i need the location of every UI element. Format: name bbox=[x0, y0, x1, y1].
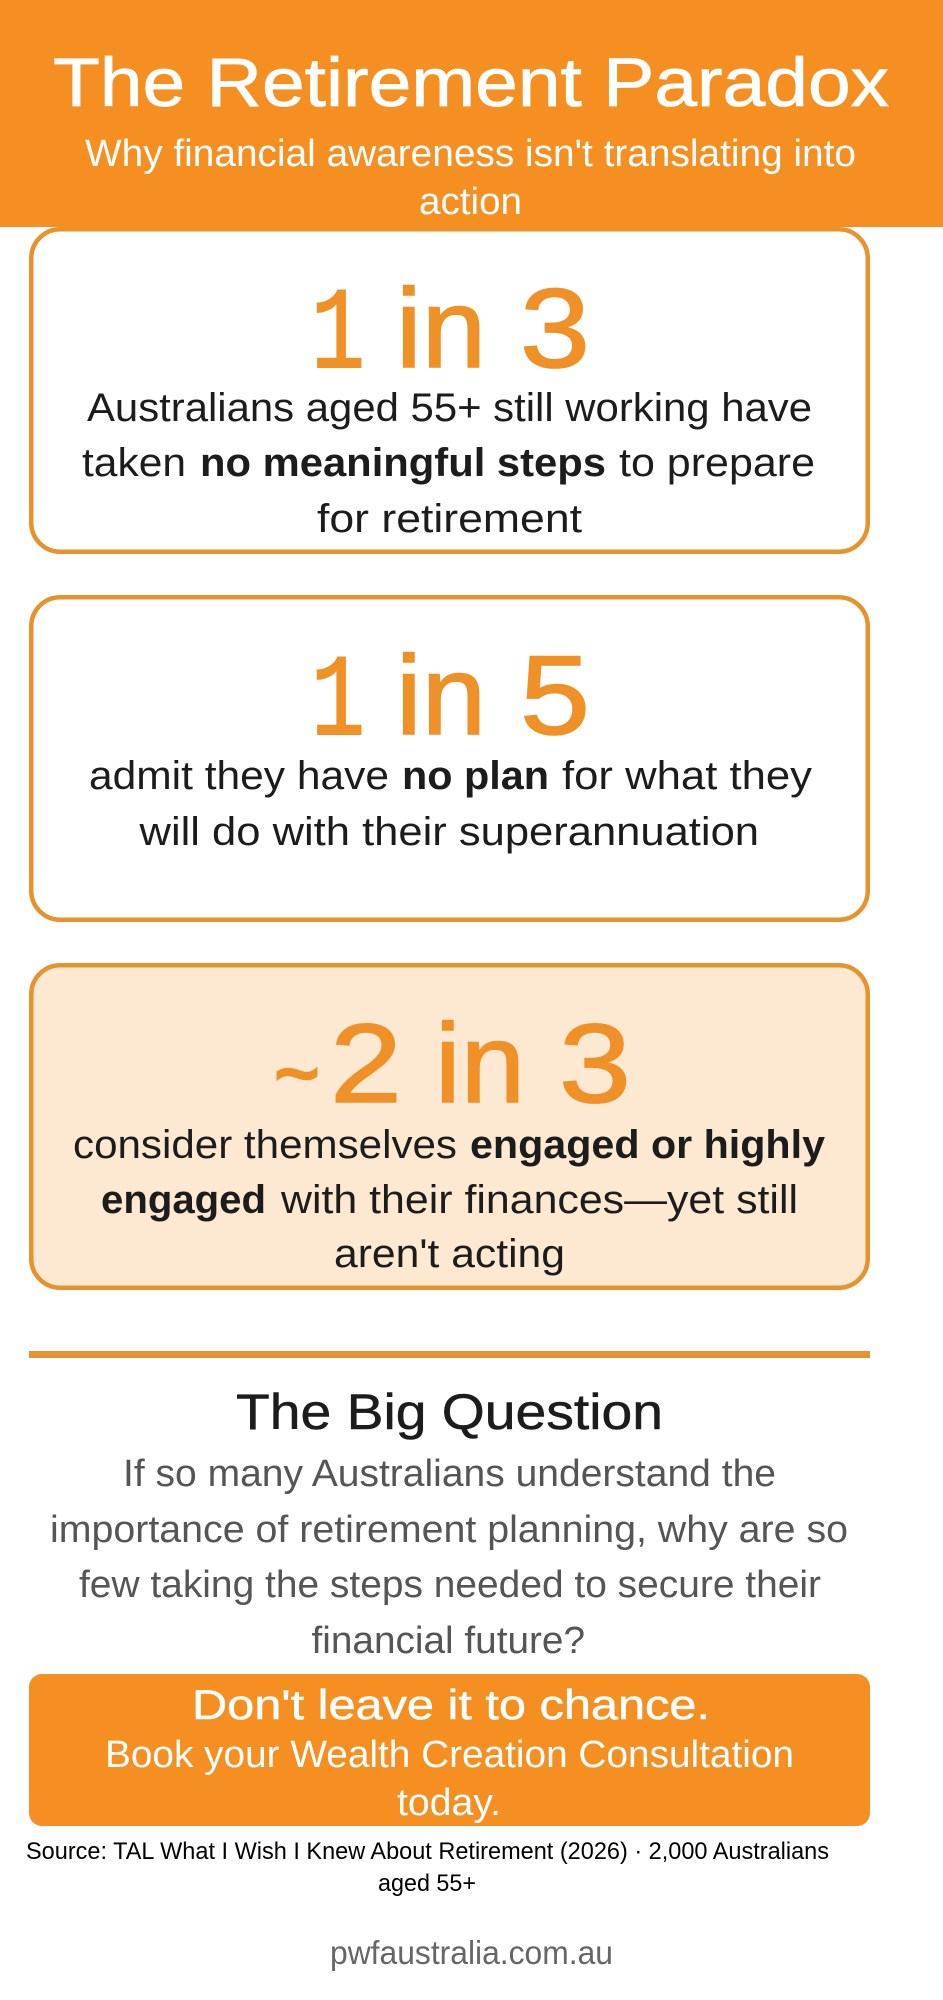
question text: few taking the steps needed to secure their bbox=[79, 1564, 821, 1606]
description text: engaged or highly bbox=[470, 1123, 826, 1167]
call to action subtext bbox=[105, 1734, 794, 1824]
description text: to prepare bbox=[619, 441, 815, 485]
statistic: ~2 in 3: in bbox=[435, 1001, 525, 1126]
call to action panel bbox=[29, 1674, 870, 1826]
description text: engaged bbox=[101, 1178, 266, 1222]
description text: will do with their superannuation bbox=[138, 810, 759, 854]
description text: with their finances—yet still bbox=[280, 1178, 798, 1222]
description text bbox=[73, 1123, 826, 1276]
subtitle: Why financial awareness isn't translating into bbox=[85, 133, 856, 175]
description text: for what they bbox=[562, 754, 812, 798]
source note: Source: TAL What I Wish I Knew About Retirement (2026) · 2,000 Australians bbox=[26, 1838, 829, 1865]
description text: consider themselves bbox=[73, 1123, 457, 1167]
heading: The Big Question: The Big Question bbox=[236, 1384, 663, 1440]
description text: for retirement bbox=[317, 497, 582, 541]
description text: admit they have bbox=[89, 754, 389, 798]
source note bbox=[26, 1838, 829, 1897]
subtitle bbox=[85, 133, 856, 223]
description text: Australians aged 55+ still working have bbox=[87, 386, 812, 430]
statistic: ~2 in 3: 2 bbox=[330, 1001, 402, 1126]
statistic: ~2 in 3 bbox=[275, 1001, 631, 1126]
statistic: 1 in 5: 5 bbox=[520, 633, 590, 758]
source note: aged 55+ bbox=[378, 1870, 476, 1897]
header banner bbox=[0, 0, 943, 227]
statistic: 1 in 5 bbox=[311, 633, 590, 769]
website: pwfaustralia.com.au bbox=[330, 1934, 613, 1971]
statistic: 1 in 3 bbox=[311, 266, 590, 402]
question text: If so many Australians understand the bbox=[123, 1453, 776, 1495]
statistic: 1 in 3: 3 bbox=[520, 266, 590, 391]
description text bbox=[82, 386, 815, 541]
panel: stat about 2 in 3 bbox=[31, 965, 868, 1288]
question text: financial future? bbox=[312, 1620, 585, 1662]
description text: aren't acting bbox=[334, 1232, 565, 1276]
panel: stat 1 in 3 bbox=[31, 229, 868, 552]
statistic: 1 in 5: in bbox=[396, 633, 486, 758]
question text bbox=[50, 1453, 848, 1662]
statistic: 1 in 5: 1 bbox=[311, 637, 365, 769]
subtitle: action bbox=[419, 181, 522, 223]
statistic: 1 in 3: 1 bbox=[311, 270, 365, 402]
panel: stat 1 in 5 bbox=[31, 597, 868, 920]
statistic: 1 in 3: in bbox=[396, 266, 486, 391]
call to action subtext: Book your Wealth Creation Consultation bbox=[105, 1734, 794, 1776]
statistic: ~2 in 3: ~ bbox=[275, 1034, 319, 1114]
question text: importance of retirement planning, why are so bbox=[50, 1509, 848, 1551]
call to action headline: Don't leave it to chance. bbox=[192, 1681, 710, 1728]
description text: no plan bbox=[402, 754, 549, 798]
title: The Retirement Paradox bbox=[53, 44, 889, 121]
description text bbox=[89, 754, 812, 854]
statistic: ~2 in 3: 3 bbox=[559, 1001, 631, 1126]
description text: taken bbox=[82, 441, 186, 485]
call to action subtext: today. bbox=[397, 1782, 501, 1824]
description text: no meaningful steps bbox=[200, 441, 606, 485]
